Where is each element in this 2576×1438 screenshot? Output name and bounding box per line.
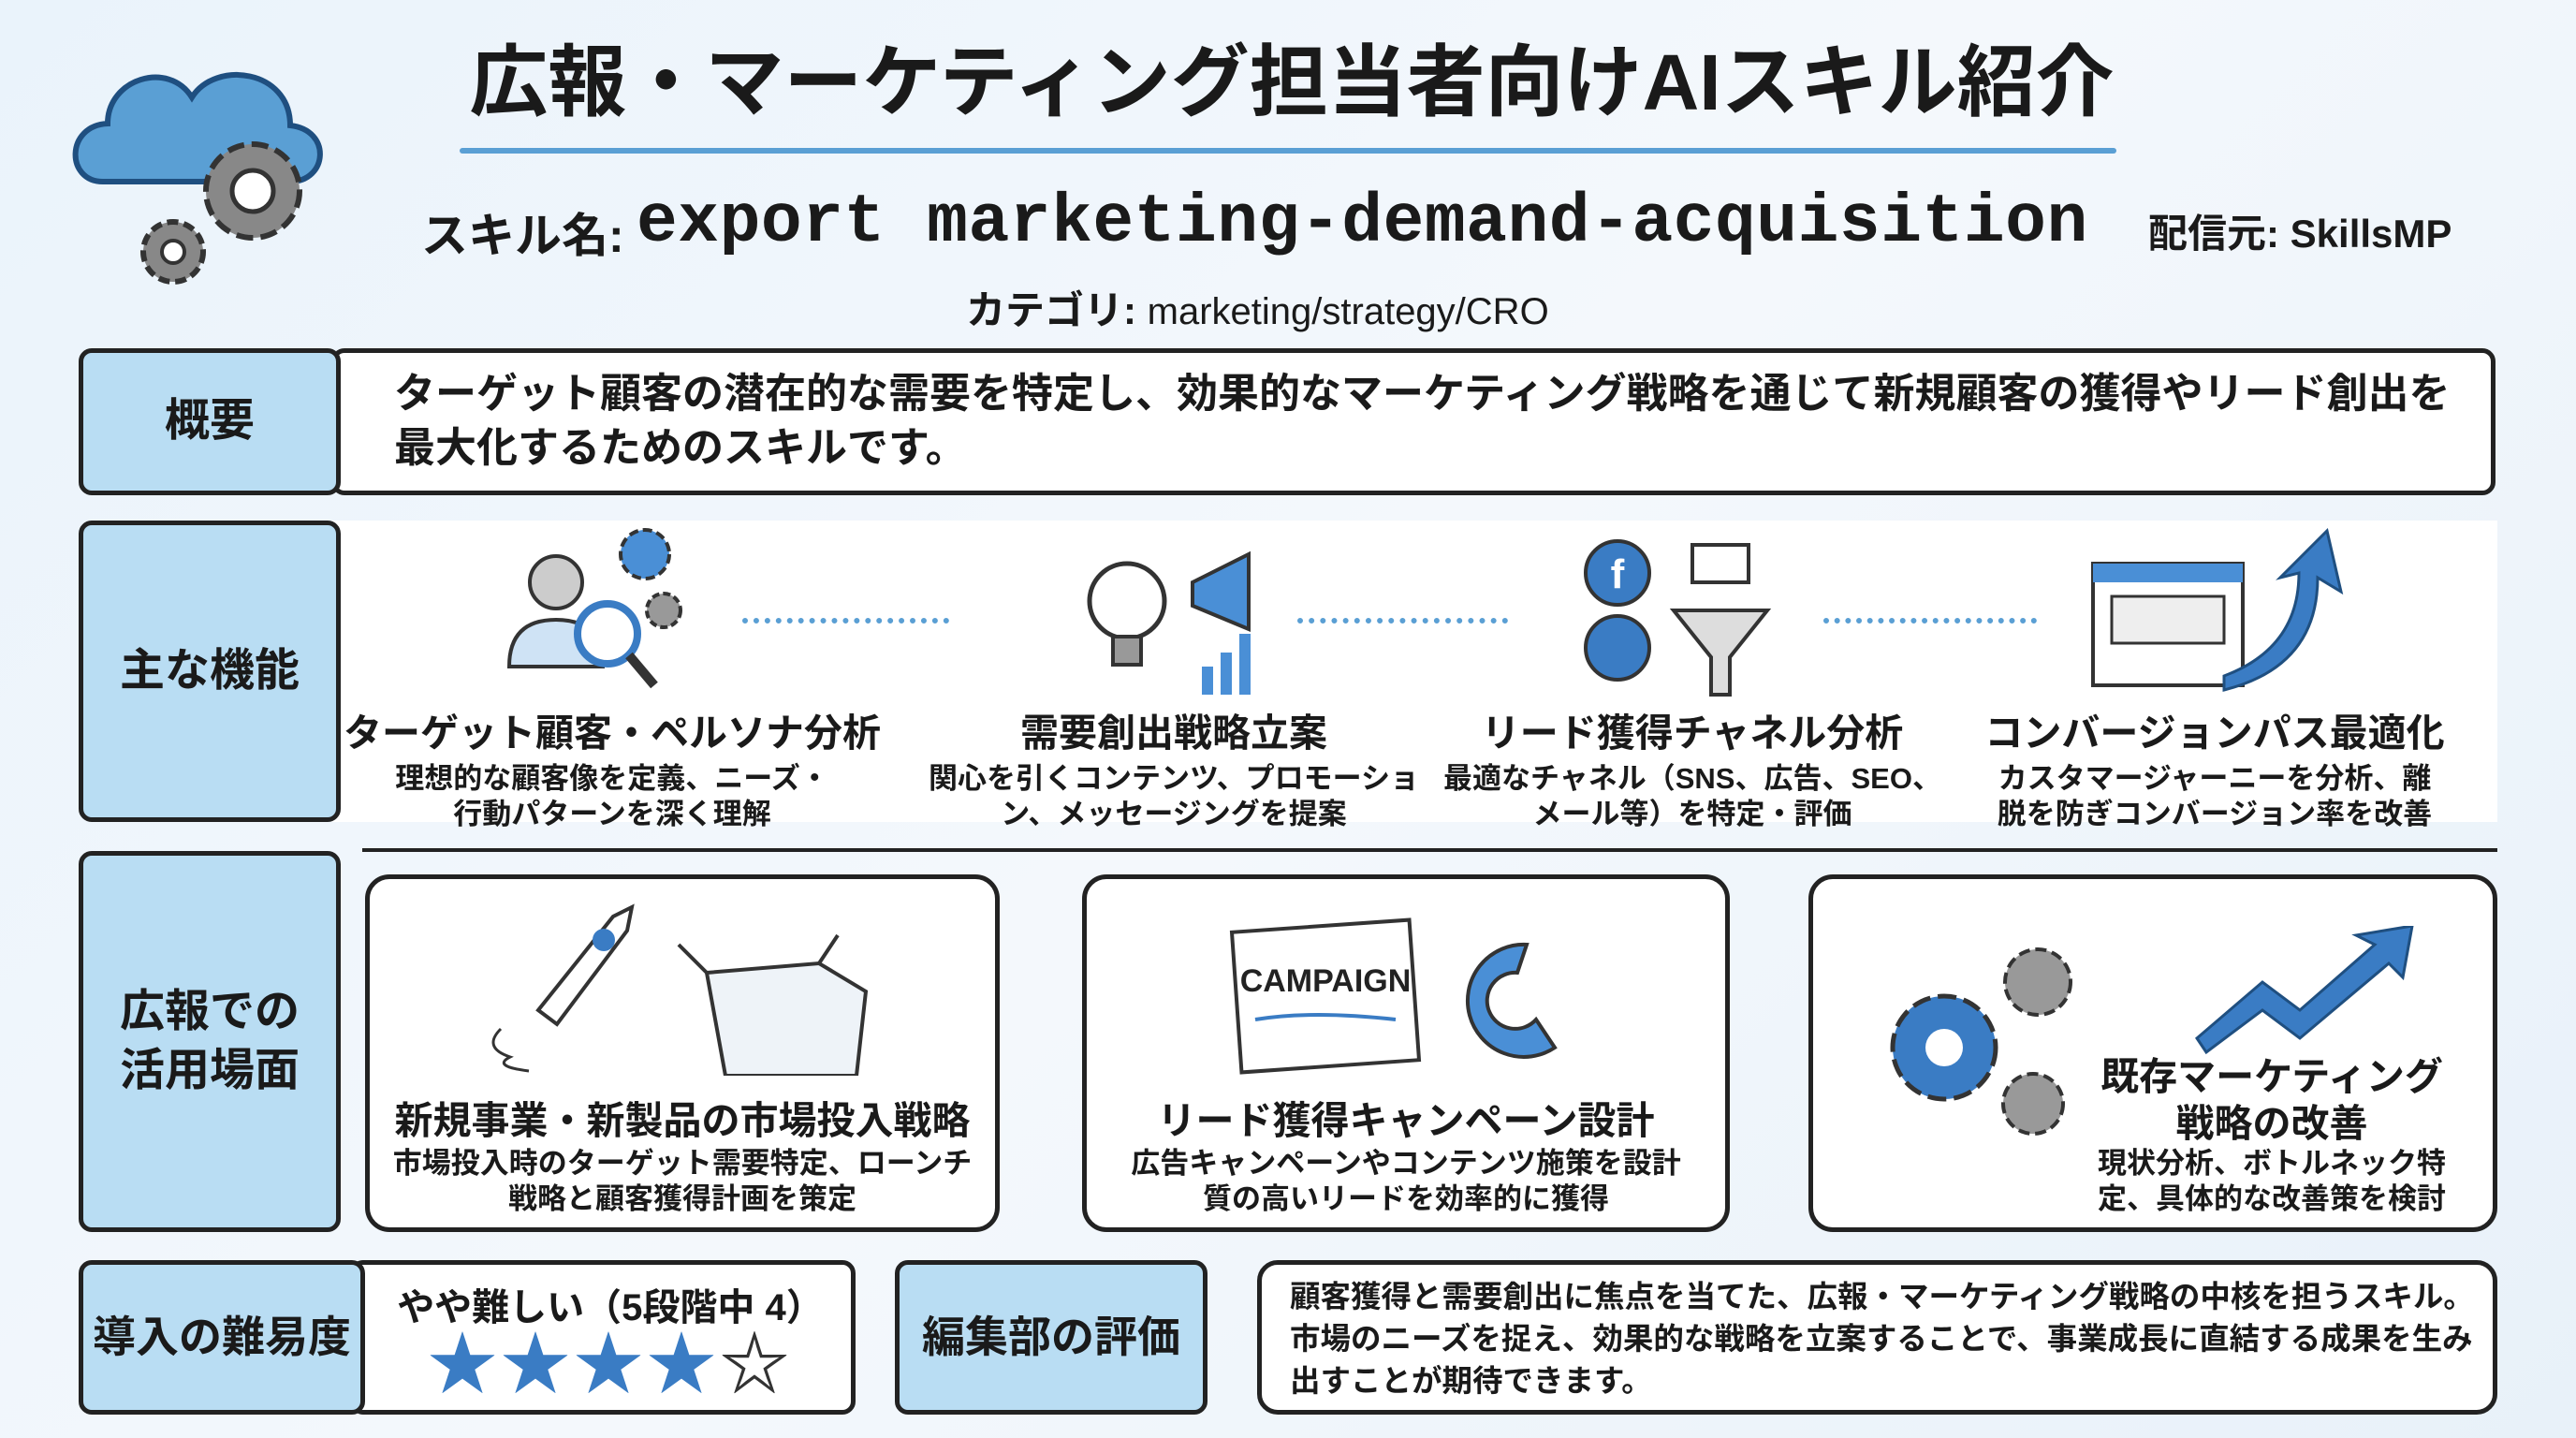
- icon: social funnel: f: [1611, 551, 1625, 597]
- label: 主な機能: 主な機能: [120, 646, 300, 696]
- card 2: [1082, 874, 1730, 1232]
- feature 1: ターゲット顧客・ペルソナ分析: [344, 712, 881, 755]
- card 2: 広告キャンペーンやコンテンツ施策を設計: [1131, 1147, 1681, 1180]
- feature 2: ン、メッセージングを提案: [1001, 798, 1347, 830]
- feature 3: [1443, 539, 1941, 830]
- feature 4: [1984, 528, 2445, 830]
- feature 2: 需要創出戦略立案: [1020, 712, 1327, 755]
- feature 1: 行動パターンを深く理解: [453, 798, 771, 830]
- label: 広報での活用場面: [79, 851, 341, 1232]
- label: 主な機能: [79, 521, 341, 822]
- feature 4: カスタマージャーニーを分析、離: [1998, 762, 2431, 795]
- icon: person with magnifier: [507, 528, 682, 689]
- skill name line: スキル名:: [421, 210, 624, 262]
- label: 概要: [79, 348, 341, 495]
- feature 2: 関心を引くコンテンツ、プロモーショ: [929, 762, 1419, 795]
- feature 2: [929, 550, 1419, 830]
- icon: cloud with gears: [73, 71, 323, 285]
- label: 概要: 概要: [165, 396, 255, 446]
- card 2: リード獲得キャンペーン設計: [1158, 1099, 1654, 1142]
- title: 広報・マーケティング担当者向けAIスキル紹介: [469, 38, 2115, 126]
- label: 広報での活用場面: 広報での: [120, 987, 300, 1036]
- icon: bulb and megaphone: [1088, 550, 1251, 695]
- icon: web page with arrow: [2091, 528, 2344, 692]
- feature 1: 理想的な顧客像を定義、ニーズ・: [395, 762, 829, 795]
- icon: gears and up arrow: [1891, 926, 2413, 1136]
- icon: rocket and box: [492, 903, 869, 1076]
- label: 導入の難易度: 導入の難易度: [93, 1313, 351, 1361]
- card 3: 定、具体的な改善策を検討: [2098, 1182, 2446, 1215]
- skill name line: export marketing-demand-acquisition: [637, 183, 2088, 261]
- review callout: 顧客獲得と需要創出に焦点を当てた、広報・マーケティング戦略の中核を担うスキル。市場のニーズを捉え、効果的な戦略を立案することで、事業成長に直結する成果を生み出すことが期待できます。: [1290, 1280, 2474, 1398]
- label: 広報での活用場面: 活用場面: [120, 1045, 300, 1095]
- feature 3: リード獲得チャネル分析: [1482, 712, 1903, 755]
- feature 4: コンバージョンパス最適化: [1984, 712, 2445, 755]
- label: 導入の難易度: [79, 1260, 365, 1415]
- label: 編集部の評価: 編集部の評価: [922, 1313, 1180, 1361]
- icon: social funnel: [1584, 539, 1771, 697]
- card 3: 戦略の改善: [2175, 1102, 2368, 1145]
- feature 3: 最適なチャネル（SNS、広告、SEO、: [1443, 762, 1941, 795]
- card 2: 質の高いリードを効率的に獲得: [1203, 1182, 1609, 1215]
- feature 3: メール等）を特定・評価: [1533, 798, 1852, 830]
- category: カテゴリ: marketing/strategy/CRO: [966, 288, 1549, 332]
- stars rating: ★★★★☆: [428, 1326, 793, 1403]
- icon: campaign calendar and magnet: [1230, 917, 1558, 1075]
- overview text: ターゲット顧客の潜在的な需要を特定し、効果的なマーケティング戦略を通じて新規顧客の獲得やリード創出を最大化するためのスキルです。: [394, 371, 2450, 471]
- feature 4: 脱を防ぎコンバージョン率を改善: [1998, 798, 2432, 830]
- feature 1: [344, 528, 881, 830]
- row: use cases: [79, 851, 2497, 1232]
- card 1: 戦略と顧客獲得計画を策定: [508, 1182, 856, 1215]
- row: difficulty: [79, 1260, 856, 1415]
- card 1: [365, 874, 1000, 1232]
- row: features: [79, 521, 2497, 852]
- card 3: 既存マーケティング: [2100, 1055, 2443, 1098]
- card 3: [1808, 874, 2497, 1232]
- icon: campaign calendar and magnet: CAMPAIGN: [1240, 963, 1411, 999]
- row: overview: [79, 348, 2496, 495]
- label: 編集部の評価: [895, 1260, 1208, 1415]
- card 3: 現状分析、ボトルネック特: [2098, 1147, 2446, 1180]
- card 1: 市場投入時のターゲット需要特定、ローンチ: [393, 1147, 972, 1180]
- skill name line: 配信元: SkillsMP: [2148, 212, 2452, 256]
- card 1: 新規事業・新製品の市場投入戦略: [395, 1099, 970, 1142]
- difficulty text: やや難しい（5段階中 4）: [397, 1287, 824, 1328]
